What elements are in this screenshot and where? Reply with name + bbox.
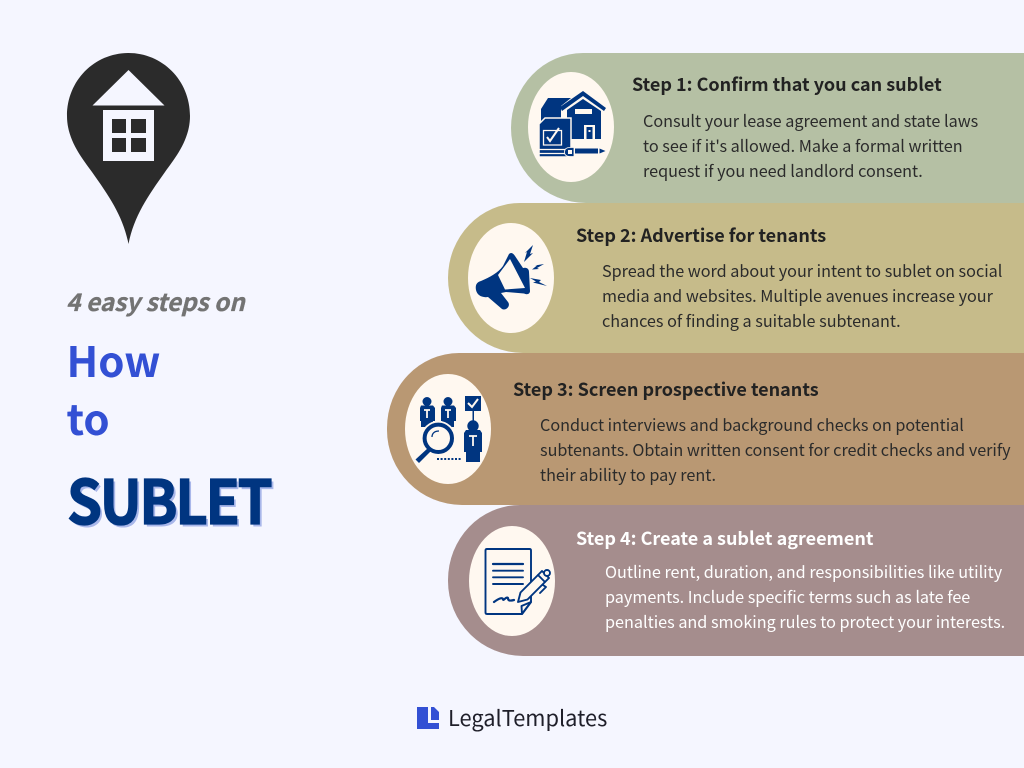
step title: Step 1: Confirm that you can sublet — [632, 71, 942, 97]
step text: subtenants. Obtain written consent for credit checks and verify — [540, 437, 1011, 461]
icon: logo mark — [417, 707, 439, 729]
panel: step 1 — [511, 53, 1024, 203]
icon: tenant screening — [405, 374, 491, 484]
panel: step 3 — [387, 353, 1024, 505]
step text: to see if it's allowed. Make a formal written — [643, 133, 963, 157]
step text: Consult your lease agreement and state laws — [643, 108, 978, 132]
step text: Outline rent, duration, and responsibilities like utility — [605, 559, 1002, 583]
step title: Step 4: Create a sublet agreement — [576, 525, 873, 551]
step text: Spread the word about your intent to sublet on social — [602, 258, 1002, 282]
step title: Step 3: Screen prospective tenants — [513, 376, 819, 402]
icon: house and checklist — [528, 72, 614, 182]
icon: megaphone — [468, 223, 554, 333]
icon: signed document — [469, 526, 555, 636]
logo: LegalTemplates — [417, 702, 607, 733]
step text: penalties and smoking rules to protect your interests. — [605, 609, 1005, 633]
step text: Conduct interviews and background checks on potential — [540, 412, 964, 436]
step text: payments. Include specific terms such as late fee — [605, 584, 970, 608]
step text — [643, 108, 978, 182]
icon: house location pin — [66, 53, 190, 244]
step text: their ability to pay rent. — [540, 462, 716, 486]
step title: Step 2: Advertise for tenants — [576, 222, 826, 248]
heading: How: How — [66, 329, 160, 390]
step text — [540, 412, 1011, 486]
step text: media and websites. Multiple avenues increase your — [602, 283, 993, 307]
step text: request if you need landlord consent. — [643, 158, 923, 182]
step text — [605, 559, 1005, 633]
step text — [602, 258, 1002, 332]
subtitle: 4 easy steps on — [66, 283, 245, 318]
heading: SUBLET: SUBLET — [67, 453, 270, 542]
heading: to: to — [66, 387, 110, 448]
step text: chances of finding a suitable subtenant. — [602, 308, 901, 332]
panel: step 4 — [448, 505, 1024, 656]
panel: step 2 — [448, 203, 1024, 353]
logo text: LegalTemplates — [448, 702, 607, 733]
